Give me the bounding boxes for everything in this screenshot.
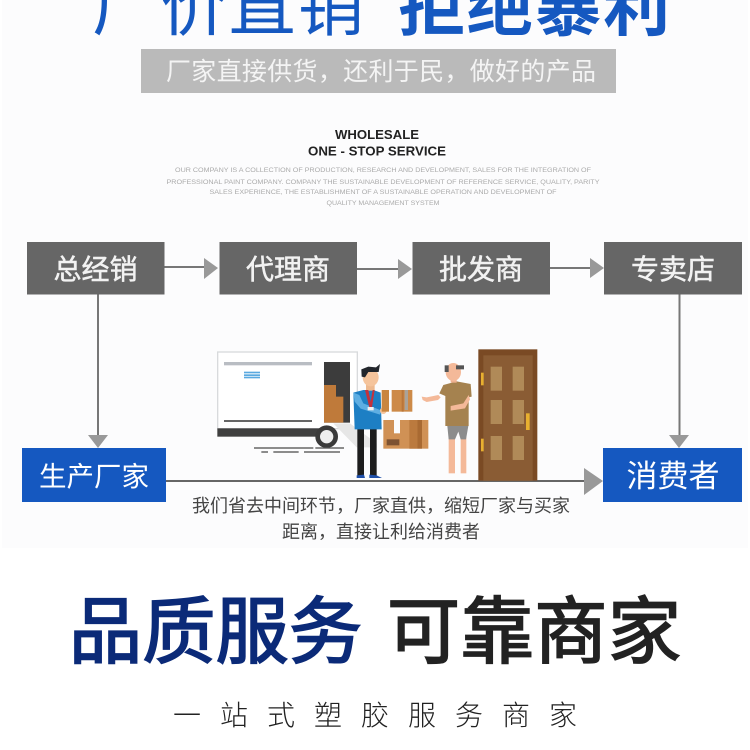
box: general distributor: 总经销: [53, 254, 138, 285]
tagline: 一站式塑胶服务商家: [173, 700, 577, 731]
box: agent: [220, 242, 357, 294]
box: wholesaler: 批发商: [439, 254, 523, 285]
box: consumer: [603, 448, 742, 502]
icon: delivery man: [353, 364, 387, 478]
box: agent: 代理商: [246, 254, 330, 285]
slogan: reliable merchant: 可靠商家: [387, 592, 681, 673]
connector arrows: [88, 258, 689, 495]
illustration: delivery scene: [217, 349, 537, 481]
english description: OUR COMPANY IS A COLLECTION OF PRODUCTION, RESEARCH AND DEVELOPMENT, SALES FOR THE INTEGRATION OF: [175, 168, 591, 174]
box: consumer: 消费者: [626, 459, 720, 494]
box: manufacturer: [22, 448, 166, 502]
english description: QUALITY MANAGEMENT SYSTEM: [326, 201, 440, 207]
box: specialty store: 专卖店: [631, 254, 715, 285]
box: general distributor: [27, 242, 164, 294]
subtitle banner: [141, 49, 616, 93]
caption text: 我们省去中间环节，厂家直供，缩短厂家与买家: [192, 496, 570, 516]
icon: customer: [422, 363, 472, 473]
english description: PROFESSIONAL PAINT COMPANY. COMPANY THE SUSTAINABLE DEVELOPMENT OF REFERENCE SERVICE, QUALITY, PARITY: [166, 180, 600, 186]
english description: SALES EXPERIENCE, THE ESTABLISHMENT OF A SUSTAINABLE OPERATION AND DEVELOPMENT OF: [210, 190, 557, 196]
box: wholesaler: [412, 242, 550, 294]
icon: cardboard boxes: [382, 390, 428, 449]
box: specialty store: [604, 242, 742, 294]
subtitle banner: 厂家直接供货，还利于民，做好的产品: [166, 58, 596, 86]
english description: [166, 168, 600, 207]
box: manufacturer: 生产厂家: [39, 461, 149, 492]
english heading: ONE - STOP SERVICE: [308, 144, 446, 158]
caption text: 距离，直接让利给消费者: [282, 522, 480, 542]
icon: wooden door: [478, 349, 537, 481]
english heading: WHOLESALE: [335, 127, 419, 142]
icon: truck: [217, 352, 377, 453]
caption text: [192, 496, 570, 542]
title: factory direct sale: [92, 0, 670, 45]
english heading: [308, 127, 446, 158]
slogan: quality service: 品质服务: [69, 592, 362, 673]
